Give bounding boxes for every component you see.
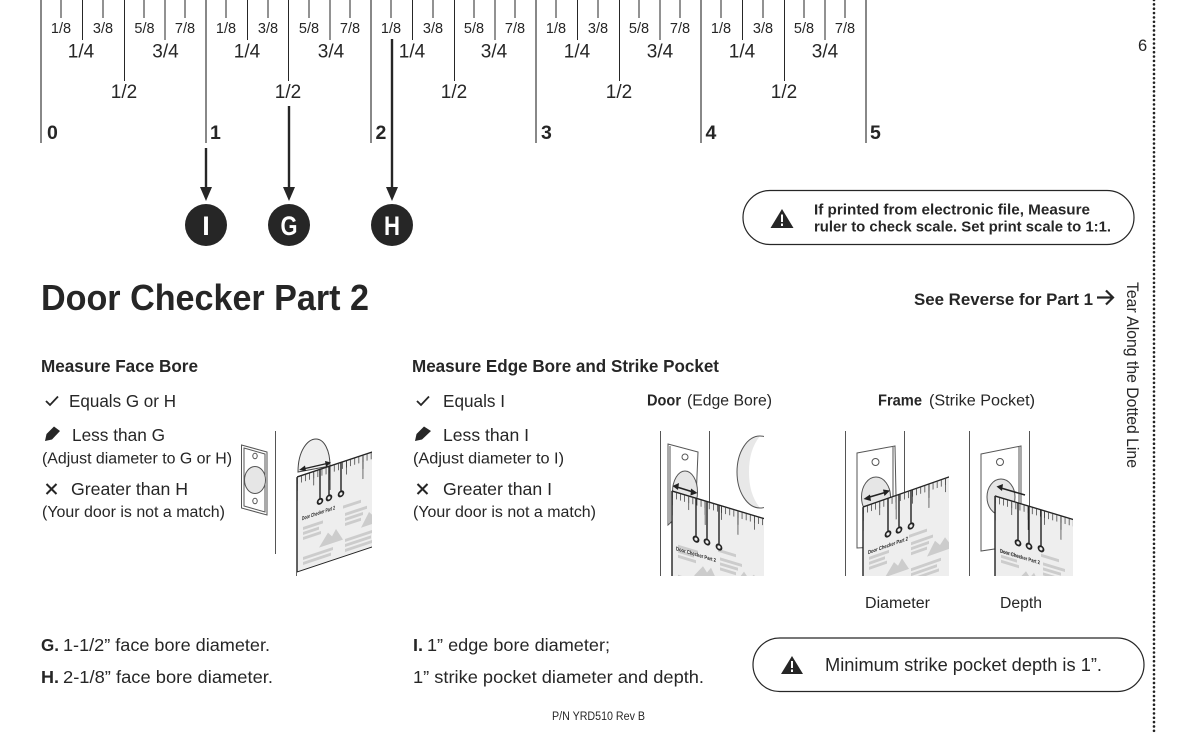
ruler quarter labels: 3/4 xyxy=(152,42,179,62)
spec: I xyxy=(413,635,704,687)
callout: print scale: ruler to check scale. Set print scale to 1:1. xyxy=(814,220,1111,236)
ruler half labels: 1/2 xyxy=(771,82,797,103)
page number: 6 xyxy=(1138,37,1147,55)
ruler on door: Door Checker Part 2 xyxy=(676,546,716,564)
heading: edge bore: Measure Edge Bore and Strike Pocket xyxy=(412,356,719,376)
ruler eighth labels: 5/8 xyxy=(134,21,155,37)
text: adjust note: (Adjust diameter to I) xyxy=(413,450,564,468)
arrow to marker G xyxy=(283,106,295,201)
marker H: H xyxy=(384,211,400,241)
callout: minimum depth xyxy=(753,638,1144,692)
icon: cross xyxy=(46,484,56,494)
ruler eighth labels: 1/8 xyxy=(51,21,71,37)
spec: I: 1” strike pocket diameter and depth. xyxy=(413,667,704,687)
text: no match note: (Your door is not a match) xyxy=(413,504,596,521)
icon: cross xyxy=(418,484,428,494)
callout: minimum depth: Minimum strike pocket depth is 1”. xyxy=(825,655,1102,675)
ruler eighth labels: 1/8 xyxy=(216,21,236,37)
part number: P/N YRD510 Rev B xyxy=(552,711,645,723)
ruler inch numbers xyxy=(47,122,881,144)
ruler on frame xyxy=(994,484,1073,576)
arrow to marker I xyxy=(200,148,212,201)
text: greater than: Greater than I xyxy=(443,479,552,499)
icon: check xyxy=(46,396,58,405)
ruler half labels xyxy=(111,82,797,103)
ruler on door xyxy=(671,483,764,576)
door edge lines xyxy=(660,431,710,576)
ruler inch numbers: 5 xyxy=(870,122,881,144)
arrow to marker H xyxy=(386,39,398,201)
spec: H: H. xyxy=(41,667,59,687)
ruler eighth labels: 7/8 xyxy=(505,21,525,37)
ruler eighth labels: 3/8 xyxy=(588,21,608,37)
tear line xyxy=(1153,0,1155,734)
icon: pencil xyxy=(45,426,60,441)
strike plate and pocket xyxy=(981,446,1021,551)
frame lines xyxy=(970,431,1030,576)
tear label: Tear Along the Dotted Line xyxy=(1123,282,1141,468)
ruler quarter labels: 1/4 xyxy=(564,42,591,62)
illustration: edge bore xyxy=(660,431,764,576)
spec: I: I. xyxy=(413,635,423,655)
text: greater than: Greater than H xyxy=(71,479,188,499)
ruler eighth labels: 1/8 xyxy=(381,21,401,37)
heading: face bore: Measure Face Bore xyxy=(41,356,198,376)
ruler eighth labels: 3/8 xyxy=(93,21,113,37)
text: adjust note: (Adjust diameter to G or H) xyxy=(42,450,232,468)
ruler quarter labels: 3/4 xyxy=(318,42,345,62)
marker G xyxy=(268,204,310,246)
ruler eighth labels: 5/8 xyxy=(299,21,319,37)
spec: G: 1-1/2” face bore diameter. xyxy=(63,635,270,655)
spec: I: 1” edge bore diameter; xyxy=(427,635,610,655)
text: equals: Equals G or H xyxy=(69,391,176,411)
ruler inch numbers: 2 xyxy=(376,122,386,144)
ruler eighth labels: 3/8 xyxy=(753,21,773,37)
ruler eighth labels: 3/8 xyxy=(423,21,443,37)
ruler on door: Door Checker Part 2 xyxy=(302,505,335,522)
ruler on frame: Door Checker Part 2 xyxy=(868,536,908,556)
ruler quarter labels: 1/4 xyxy=(234,42,261,62)
label: frame: Frame xyxy=(878,392,922,410)
text: equals: Equals I xyxy=(443,391,505,411)
ruler quarter labels: 3/4 xyxy=(481,42,508,62)
label: depth: Depth xyxy=(1000,595,1042,612)
ruler on frame: Door Checker Part 2 xyxy=(1000,549,1040,566)
ruler half labels: 1/2 xyxy=(606,82,632,103)
ruler inch numbers: 1 xyxy=(210,122,221,144)
edge plate and bore xyxy=(668,436,764,526)
text: less than: Less than I xyxy=(443,425,529,445)
icon: pencil xyxy=(415,426,431,441)
ruler quarter labels: 1/4 xyxy=(729,42,756,62)
ruler eighth labels: 5/8 xyxy=(794,21,814,37)
ruler eighth labels: 7/8 xyxy=(670,21,690,37)
ruler quarter labels: 1/4 xyxy=(399,42,426,62)
illustration: strike pocket diameter xyxy=(845,431,949,576)
marker I: I xyxy=(202,211,210,241)
ruler half labels: 1/2 xyxy=(111,82,137,103)
label: door xyxy=(647,392,772,410)
panel: measure edge bore and strike pocket xyxy=(412,356,719,521)
ruler eighth labels xyxy=(51,21,855,37)
icon: check xyxy=(417,396,429,405)
callout: print scale xyxy=(743,190,1134,244)
ruler inch numbers: 4 xyxy=(706,122,716,144)
ruler on door xyxy=(296,438,372,576)
ruler on frame xyxy=(862,476,949,576)
door plate xyxy=(242,445,267,515)
ruler quarter labels: 3/4 xyxy=(647,42,674,62)
ruler quarter labels: 1/4 xyxy=(68,42,95,62)
label: frame xyxy=(878,392,1035,410)
label: diameter: Diameter xyxy=(865,595,930,612)
spec: H: 2-1/8” face bore diameter. xyxy=(63,667,273,687)
text: no match note: (Your door is not a match) xyxy=(42,504,225,521)
door edge xyxy=(274,431,276,554)
callout: print scale: If printed from electronic file, Measure xyxy=(814,203,1090,219)
illustration: face bore xyxy=(241,431,372,576)
label: door: Door xyxy=(647,392,681,410)
ruler tick marks xyxy=(41,0,866,143)
marker G: G xyxy=(280,211,298,241)
text: less than: Less than G xyxy=(72,425,165,445)
label: door: (Edge Bore) xyxy=(687,392,772,410)
ruler inch numbers: 3 xyxy=(541,122,552,144)
panel: measure face bore xyxy=(41,356,232,521)
marker I xyxy=(185,204,227,246)
ruler eighth labels: 7/8 xyxy=(175,21,195,37)
frame lines xyxy=(846,431,904,576)
ruler eighth labels: 3/8 xyxy=(258,21,278,37)
ruler quarter labels: 3/4 xyxy=(812,42,839,62)
ruler half labels: 1/2 xyxy=(275,82,301,103)
spec: G: G. xyxy=(41,635,59,655)
see reverse link: See Reverse for Part 1 xyxy=(914,290,1093,309)
ruler eighth labels: 7/8 xyxy=(835,21,855,37)
ruler eighth labels: 5/8 xyxy=(464,21,484,37)
marker H xyxy=(371,204,413,246)
ruler eighth labels: 1/8 xyxy=(546,21,566,37)
ruler eighth labels: 7/8 xyxy=(340,21,360,37)
strike plate and pocket xyxy=(857,446,897,548)
ruler eighth labels: 5/8 xyxy=(629,21,649,37)
title: Door Checker Part 2 xyxy=(41,277,369,318)
ruler eighth labels: 1/8 xyxy=(711,21,731,37)
label: frame: (Strike Pocket) xyxy=(929,392,1035,410)
illustration: strike pocket depth xyxy=(969,431,1073,576)
ruler quarter labels xyxy=(68,42,839,62)
ruler half labels: 1/2 xyxy=(441,82,467,103)
ruler inch numbers: 0 xyxy=(47,122,58,144)
